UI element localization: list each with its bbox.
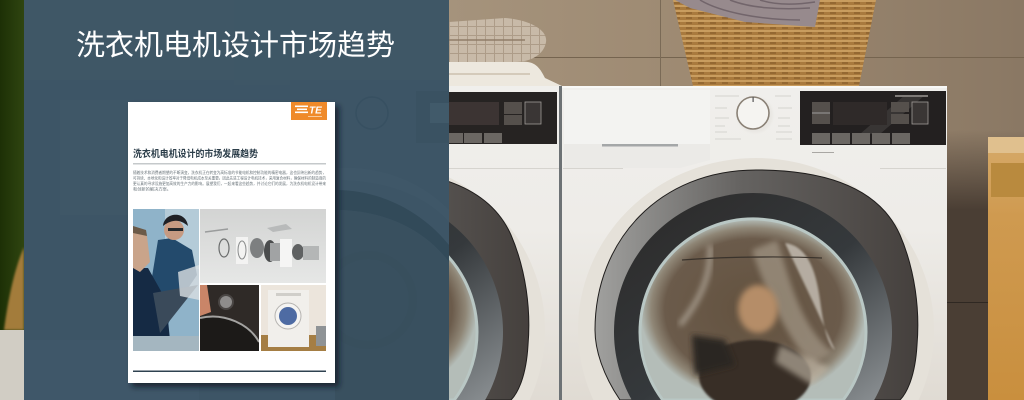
dial program labels [715, 95, 792, 140]
panel: translucent blue overlay [24, 0, 449, 400]
detergent drawer [564, 90, 710, 168]
program dial [737, 97, 773, 133]
TE logo: TE [309, 106, 322, 116]
left machine control panel [449, 92, 557, 144]
document preview [128, 102, 335, 383]
document body text: 和创新的解决方案。 [133, 186, 171, 192]
right washing machine [562, 86, 947, 400]
photo: dark washing machine [200, 285, 259, 351]
wicker basket with towel [673, 0, 876, 86]
wooden cabinet [988, 137, 1024, 400]
stacked towels [449, 18, 562, 86]
left machine door [449, 178, 538, 400]
TE logo [291, 102, 327, 120]
wall tiles [449, 0, 1024, 400]
photo: engineers at work [133, 209, 199, 351]
right machine door [578, 158, 934, 400]
title: 洗衣机电机设计市场趋势 [76, 22, 395, 64]
document body text [133, 169, 326, 192]
right machine control panel [800, 91, 946, 145]
left washing machine [449, 86, 562, 400]
photo: exploded washing machine [200, 209, 326, 283]
strip: blurred plant on the far left [0, 0, 24, 400]
photo: white washing machine [261, 285, 326, 351]
document heading: 洗衣机电机设计的市场发展趋势 [133, 146, 258, 160]
ghosted washing machine in overlay [24, 0, 449, 400]
document body text: 更认真的寻求设施更加高效的生产力的影响。展望我们，一起来看这些趋势，并讨论它们的发展，为洗衣机电机设计带来 [133, 180, 326, 186]
document body text: 可持续、本地化和设计效率对于降低电机成本至关重要。因此先进工程设计电机技术，采用复合材料，确保材料的制造商的 [133, 174, 326, 180]
document body text: 随着技术和消费者期望的不断演变，洗衣机正在转变为高标准的节能电机和控制功能的精密电器，这也反映出新的趋势， [133, 169, 326, 175]
